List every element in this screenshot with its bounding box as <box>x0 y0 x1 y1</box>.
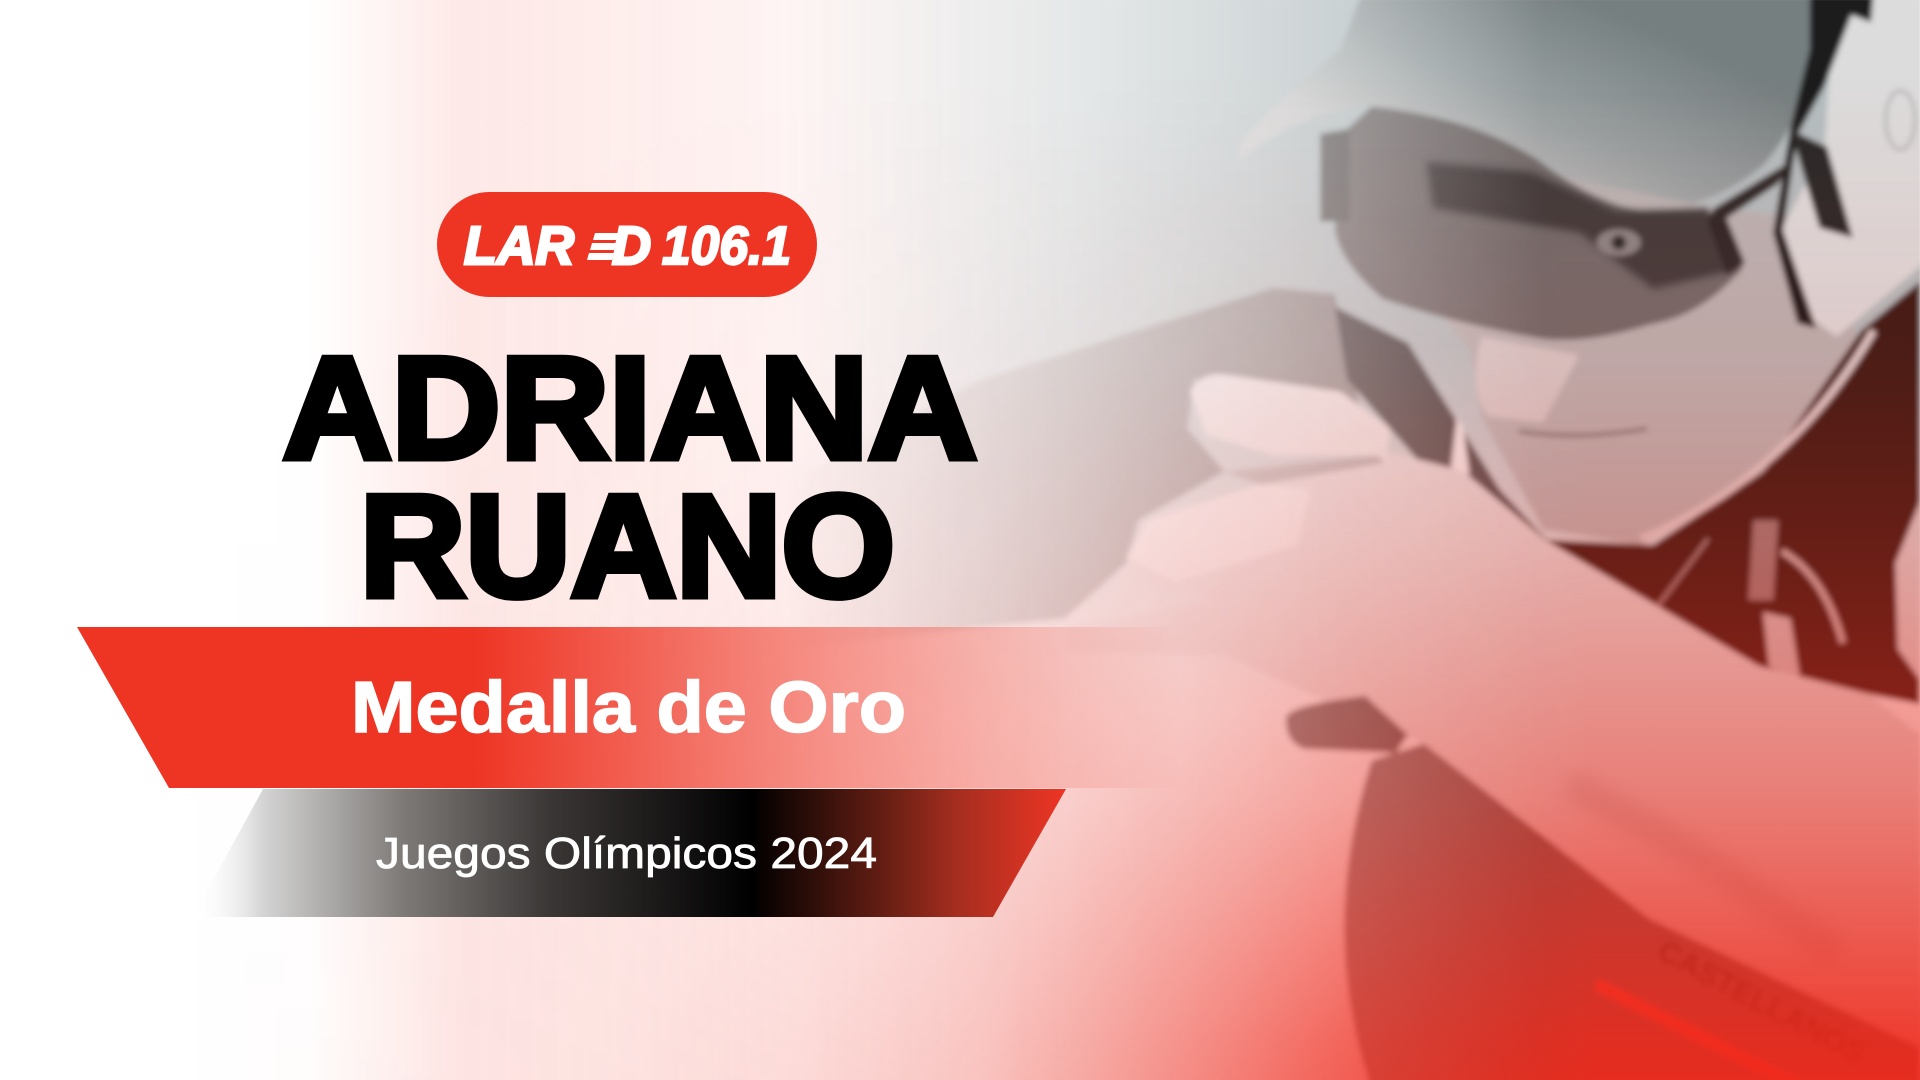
logo: Lared 106.1: LAR <box>464 216 574 276</box>
jacket lettering: CASTELLANOS <box>1652 934 1871 1072</box>
logo: Lared 106.1: 106.1 <box>662 216 791 276</box>
title: athlete name: RUANO <box>360 465 895 627</box>
photo: shooter aiming <box>844 0 1920 1080</box>
title: athlete name <box>283 327 977 627</box>
banner: event: Juegos Olímpicos 2024 <box>376 829 877 878</box>
logo: Lared 106.1: D <box>612 216 651 276</box>
banner: medal: Medalla de Oro <box>351 668 906 748</box>
title: athlete name: ADRIANA <box>283 327 977 489</box>
banner: event <box>193 789 1066 917</box>
red gradient overlay <box>532 182 1920 1080</box>
banner: medal <box>77 627 1180 788</box>
logo: Lared 106.1 <box>437 192 817 297</box>
